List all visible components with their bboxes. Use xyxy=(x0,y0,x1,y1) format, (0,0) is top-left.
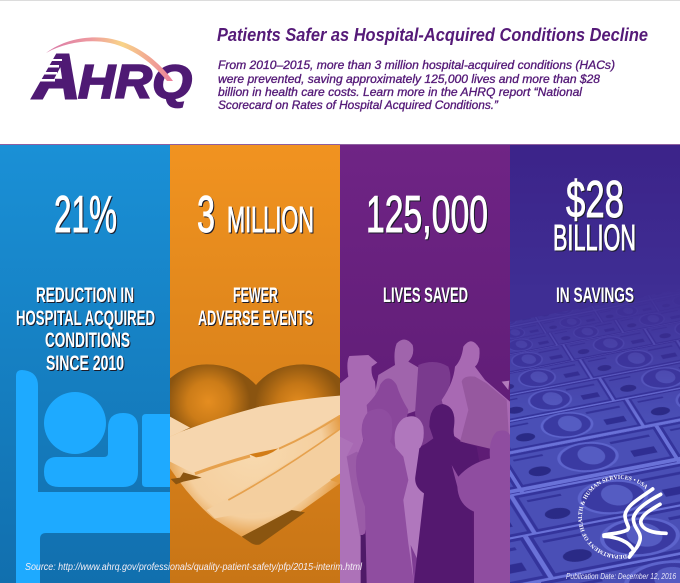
label: in savings: IN SAVINGS xyxy=(556,284,634,307)
intro paragraph: Scorecard on Rates of Hospital Acquired Conditions.” xyxy=(218,98,499,112)
icon: bandaged heart xyxy=(170,364,340,545)
illustration: sheet of dollar bills xyxy=(510,285,680,583)
AHRQ logo: HRQ xyxy=(78,55,192,108)
stat: 125,000: 125,000 xyxy=(366,186,488,244)
heading: Patients Safer as Hospital-Acquired Conditions Decline xyxy=(217,25,648,45)
intro paragraph xyxy=(218,58,615,112)
stat: 3 million xyxy=(197,186,314,244)
stat: 3 million: MILLION xyxy=(227,199,314,240)
label: lives saved: LIVES SAVED xyxy=(383,284,468,307)
icon: hospital bed xyxy=(16,370,170,583)
panel: hospital conditions xyxy=(0,145,170,583)
stat: 3 million: 3 xyxy=(197,186,215,244)
AHRQ logo: A xyxy=(32,43,80,112)
header panel xyxy=(0,0,680,145)
label: reduction in hospital acquired conditions: HOSPITAL ACQUIRED xyxy=(16,307,155,330)
seal: HHS: DEPARTMENT OF HEALTH & HUMAN SERVICES • USA xyxy=(578,475,647,559)
AHRQ logo xyxy=(30,37,192,112)
intro paragraph: From 2010–2015, more than 3 million hospital-acquired conditions (HACs) xyxy=(218,58,615,72)
label: fewer adverse events: FEWER xyxy=(233,284,278,307)
stat: 21%: 21% xyxy=(54,186,117,244)
label: fewer adverse events: ADVERSE EVENTS xyxy=(198,307,313,330)
stat: $28 billion xyxy=(553,171,636,258)
label: reduction in hospital acquired conditions xyxy=(16,284,155,375)
label: reduction in hospital acquired conditions: SINCE 2010 xyxy=(46,352,124,375)
stat: $28 billion: $28 xyxy=(566,171,624,229)
panel: lives saved xyxy=(340,145,510,583)
intro paragraph: were prevented, saving approximately 125,000 lives and more than $28 xyxy=(218,72,600,86)
label: reduction in hospital acquired conditions: REDUCTION IN xyxy=(36,284,134,307)
panel: savings xyxy=(510,145,680,583)
source note: Source: http://www.ahrq.gov/professionals/quality-patient-safety/pfp/2015-interim.html xyxy=(25,561,363,573)
illustration: crowd silhouettes xyxy=(340,340,510,583)
panel: adverse events xyxy=(170,145,340,583)
intro paragraph: billion in health care costs. Learn more in the AHRQ report “National xyxy=(218,85,583,99)
label: reduction in hospital acquired conditions: CONDITIONS xyxy=(45,329,130,352)
label: fewer adverse events xyxy=(198,284,313,330)
